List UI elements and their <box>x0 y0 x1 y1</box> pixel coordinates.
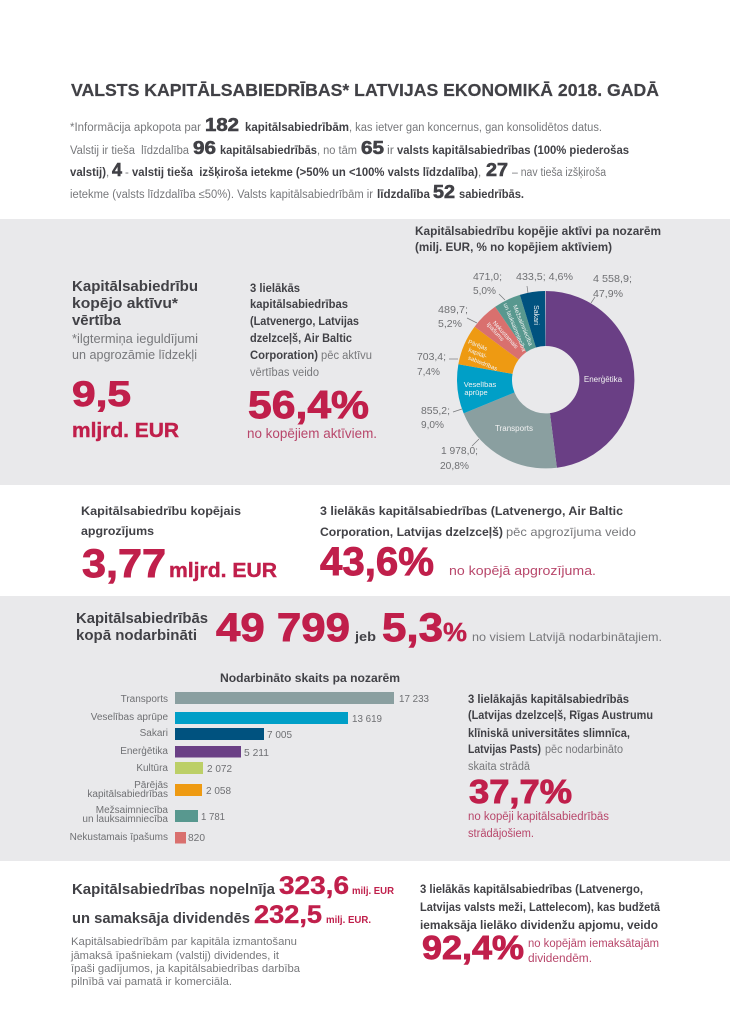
panel: employment headline: % <box>443 617 467 647</box>
bar chart: employees by sector: Transports <box>121 694 168 705</box>
panel: top 3 companies by employees: strādājošiem. <box>468 828 534 840</box>
panel: top 3 companies by assets: (Latvenergo, Latvijas <box>250 316 359 328</box>
donut chart: assets by sector: Sakari <box>532 305 539 325</box>
donut chart: assets by sector: Transports <box>495 424 533 433</box>
donut chart: assets by sector: Veselības <box>464 380 497 389</box>
bar chart: employees by sector: Enerģētika <box>120 744 168 757</box>
bar chart: employees by sector: 7 005 <box>267 729 292 741</box>
donut chart: assets by sector: sabiedrības <box>467 355 498 373</box>
intro text block: 96 <box>193 138 216 158</box>
panel: top 3 companies by assets: 3 lielākās <box>250 283 300 295</box>
bar chart: employees by sector: kapitālsabiedrības <box>87 789 168 800</box>
panel: total assets value: kopējo aktīvu* <box>72 295 178 312</box>
panel: profit and dividends <box>70 872 394 988</box>
donut chart: assets by sector: 433,5; 4,6% <box>516 271 573 283</box>
intro text block: 182 <box>205 115 239 135</box>
bar chart: employees by sector <box>70 673 429 844</box>
panel: top 3 companies by assets <box>247 283 377 441</box>
intro text block: , <box>106 167 109 179</box>
intro text block: 52 <box>433 182 455 202</box>
panel: top 3 companies by employees: (Latvijas dzelzceļš, Rīgas Austrumu <box>468 710 653 722</box>
panel: top 3 companies by turnover: no kopējā apgrozījuma. <box>449 563 596 578</box>
panel: top 3 companies by dividends: 92,4% <box>422 929 524 966</box>
panel: top 3 companies by dividends: Latvijas valsts meži, Lattelecom), kas budžetā <box>420 902 661 914</box>
intro text block: valsts kapitālsabiedrības (100% piederošas <box>397 145 629 157</box>
intro text block: *Informācija apkopota par <box>70 122 201 134</box>
donut chart: assets by sector: Mežsaimniecība <box>511 304 533 347</box>
donut chart: assets by sector: 471,0; <box>473 271 502 283</box>
intro text block: , no tām <box>317 145 357 157</box>
bar chart: employees by sector: 820 <box>188 832 205 844</box>
donut chart: assets by sector: 20,8% <box>440 460 469 472</box>
bar chart: employees by sector: 17 233 <box>399 693 429 705</box>
donut chart: assets by sector: 7,4% <box>417 366 440 378</box>
intro text block: kapitālsabiedrībās <box>220 145 317 157</box>
donut chart: assets by sector: 47,9% <box>593 288 623 300</box>
panel: top 3 companies by dividends: 3 lielākās kapitālsabiedrības (Latvenergo, <box>420 884 643 896</box>
panel: total assets value: mljrd. EUR <box>72 420 180 442</box>
panel: top 3 companies by employees: skaita strādā <box>468 761 531 773</box>
panel: top 3 companies by employees: no kopēji kapitālsabiedrībās <box>468 811 609 823</box>
intro text block: - <box>125 167 129 179</box>
panel: total assets value: 9,5 <box>72 375 131 414</box>
donut chart: assets by sector: Enerģētika <box>584 375 623 384</box>
panel: top 3 companies by turnover: pēc apgrozījuma veido <box>506 525 636 539</box>
panel: employment headline <box>76 606 662 650</box>
panel: top 3 companies by assets: 56,4% <box>248 384 369 427</box>
panel: top 3 companies by turnover: Corporation, Latvijas dzelzceļš) <box>320 525 503 539</box>
bar chart: employees by sector: Pārējās <box>134 780 168 791</box>
bar chart: employees by sector: 13 619 <box>352 713 382 725</box>
intro text block: ir <box>387 145 394 157</box>
bar chart: employees by sector: 2 072 <box>207 763 232 775</box>
panel: top 3 companies by assets: dzelzceļš, Air Baltic <box>250 333 353 345</box>
intro text block: – nav tieša izšķiroša <box>512 167 607 179</box>
donut chart: assets by sector: un lauksaimniecība <box>502 303 527 353</box>
panel: profit and dividends: 232,5 <box>254 901 322 929</box>
donut chart heading: (milj. EUR, % no kopējiem aktīviem) <box>415 242 612 254</box>
panel: top 3 companies by employees: 3 lielākajās kapitālsabiedrībās <box>468 694 629 706</box>
panel: top 3 companies by assets: kapitālsabiedrības <box>250 299 348 311</box>
donut chart: assets by sector: 855,2; <box>421 405 450 417</box>
bar chart: employees by sector: 5 211 <box>244 747 269 759</box>
intro text block <box>70 115 629 202</box>
panel: top 3 companies by turnover: 3 lielākās kapitālsabiedrības (Latvenergo, Air Baltic <box>320 504 623 518</box>
intro text block: , kas ietver gan koncernus, gan konsolidētos datus. <box>349 122 602 134</box>
intro text block: kapitālsabiedrībām <box>245 122 349 134</box>
panel: employment headline: 5,3 <box>382 606 443 650</box>
panel: top 3 companies by dividends: dividendēm. <box>528 953 592 965</box>
donut chart: assets by sector: 489,7; <box>438 304 468 316</box>
panel: profit and dividends: jāmaksā īpašniekam (valstij) dividendes, it <box>70 950 279 962</box>
donut chart heading: Kapitālsabiedrību kopējie aktīvi pa nozarēm <box>415 226 661 238</box>
panel: top 3 companies by dividends: no kopējām iemaksātajām <box>528 938 659 950</box>
bar chart: employees by sector: Sakari <box>140 728 168 739</box>
bar chart: employees by sector: un lauksaimniecība <box>82 814 168 825</box>
bar chart: employees by sector: 1 781 <box>201 811 225 823</box>
panel: total turnover <box>81 504 278 586</box>
panel: total assets value: *ilgtermiņa ieguldījumi <box>72 332 198 346</box>
intro text block: , <box>478 167 481 179</box>
intro text block: valstij) <box>70 167 106 179</box>
panel: top 3 companies by assets: pēc aktīvu <box>321 350 372 362</box>
bar chart: employees by sector: Nekustamais īpašums <box>70 832 168 843</box>
intro text block: 27 <box>486 160 508 180</box>
donut chart heading <box>415 226 661 254</box>
donut chart: assets by sector: 5,0% <box>473 285 496 297</box>
donut chart: assets by sector <box>417 271 632 472</box>
panel: employment headline: kopā nodarbināti <box>76 627 197 644</box>
panel: profit and dividends: pilnībā vai pamatā ir komerciāla. <box>71 976 232 988</box>
panel: total turnover: apgrozījums <box>81 524 154 538</box>
panel: profit and dividends: Kapitālsabiedrībām par kapitāla izmantošanu <box>71 936 297 948</box>
donut chart: assets by sector: aprūpe <box>464 388 488 397</box>
panel: top 3 companies by assets: Corporation) <box>250 350 318 362</box>
intro text block: ietekme (valsts līdzdalība ≤50%). Valsts kapitālsabiedrībām ir <box>70 189 373 201</box>
panel: top 3 companies by employees: 37,7% <box>469 773 572 810</box>
bar chart: employees by sector: Kultūra <box>136 763 168 774</box>
intro text block: līdzdalība <box>377 189 431 201</box>
panel: employment headline: no visiem Latvijā nodarbinātajiem. <box>472 630 662 644</box>
panel: top 3 companies by employees: pēc nodarbināto <box>545 744 623 756</box>
intro text block: Valstij ir tieša līdzdalība <box>70 145 190 157</box>
panel: top 3 companies by assets: no kopējiem aktīviem. <box>247 426 377 441</box>
panel: top 3 companies by employees <box>468 694 653 840</box>
bar chart: employees by sector: 2 058 <box>206 785 231 797</box>
intro text block: sabiedrībās. <box>459 189 524 201</box>
donut chart: assets by sector: 1 978,0; <box>441 445 478 457</box>
bar chart: employees by sector: Nodarbināto skaits pa nozarēm <box>220 673 400 685</box>
panel: top 3 companies by dividends <box>420 884 661 966</box>
panel: profit and dividends: un samaksāja dividendēs <box>72 910 250 927</box>
panel: employment headline: 49 799 <box>216 606 350 650</box>
title: VALSTS KAPITĀLSABIEDRĪBAS* LATVIJAS EKONOMIKĀ 2018. GADĀ <box>71 80 659 100</box>
donut chart: assets by sector: 9,0% <box>421 419 444 431</box>
panel: total assets value: Kapitālsabiedrību <box>72 278 198 295</box>
donut chart: assets by sector: Nekustamais <box>491 320 519 350</box>
panel: total assets value: vērtība <box>72 312 122 329</box>
donut chart: assets by sector: 703,4; <box>417 351 446 363</box>
panel: total turnover: mljrd. EUR <box>169 560 278 582</box>
intro text block: 4 <box>112 160 122 180</box>
donut chart: assets by sector: 5,2% <box>438 318 462 330</box>
panel: total assets value <box>72 278 198 442</box>
donut chart: assets by sector: Pārējās <box>467 339 488 353</box>
panel: total turnover: Kapitālsabiedrību kopējais <box>81 504 241 518</box>
panel: top 3 companies by turnover <box>320 504 636 584</box>
panel: top 3 companies by employees: klīniskā universitātes slimnīca, <box>468 728 630 740</box>
panel: profit and dividends: īpaši gadījumos, ja kapitālsabiedrības darbība <box>71 963 301 975</box>
panel: profit and dividends: 323,6 <box>279 872 349 900</box>
panel: profit and dividends: Kapitālsabiedrības nopelnīja <box>72 881 276 898</box>
intro text block: valstij tieša izšķiroša ietekme (>50% un <100% valsts līdzdalība) <box>132 167 478 179</box>
panel: profit and dividends: milj. EUR <box>352 885 394 897</box>
bar chart: employees by sector: Veselības aprūpe <box>91 712 168 723</box>
bar chart: employees by sector: Mežsaimniecība <box>96 805 168 816</box>
panel: top 3 companies by turnover: 43,6% <box>320 540 434 584</box>
intro text block: 65 <box>361 138 384 158</box>
panel: top 3 companies by employees: Latvijas Pasts) <box>468 744 541 756</box>
panel: total assets value: un apgrozāmie līdzekļi <box>72 348 197 362</box>
panel: total turnover: 3,77 <box>82 542 166 586</box>
panel: employment headline: Kapitālsabiedrībās <box>76 610 208 627</box>
donut chart: assets by sector: īpašums <box>485 322 505 343</box>
panel: profit and dividends: milj. EUR. <box>326 914 371 926</box>
donut chart: assets by sector: 4 558,9; <box>593 273 632 285</box>
donut chart: assets by sector: kapitāl- <box>467 348 487 360</box>
panel: top 3 companies by dividends: iemaksāja lielāko dividenžu apjomu, veido <box>420 920 658 932</box>
panel: top 3 companies by assets: vērtības veido <box>250 367 319 379</box>
panel: employment headline: jeb <box>354 629 376 644</box>
